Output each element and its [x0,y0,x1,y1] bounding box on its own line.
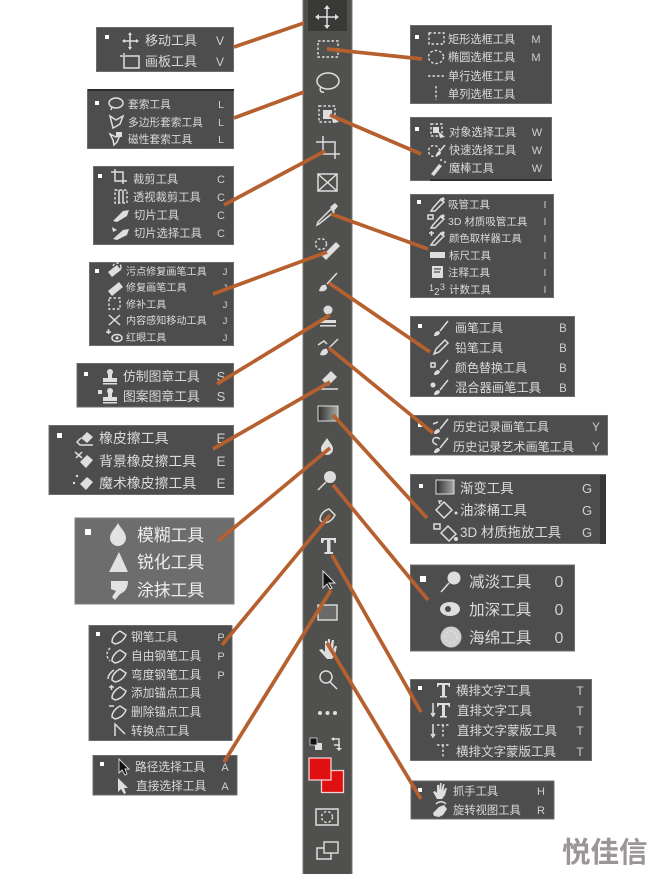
background color swatch [322,770,344,792]
row: 裁剪工具: 裁剪工具 [133,172,178,186]
row: 图案图章工具: S [217,389,226,404]
icon: pen tool [320,509,335,523]
icon: brush tool [319,273,337,291]
row: 横排文字工具 [437,683,584,698]
row: 混合器画笔工具: 混合器画笔工具 [455,380,541,395]
row: 计数工具: 1 [429,283,434,293]
icon: healing brush tool [316,238,340,260]
row: 弯度钢笔工具 [108,668,225,682]
row: 对象选择工具 [431,124,543,139]
row: 直排文字工具 [431,703,584,718]
panel: stamp tools [77,364,234,407]
row: 直接选择工具: 直接选择工具 [136,779,206,793]
row: 裁剪工具: C [217,174,225,186]
row: 污点修复画笔工具: J [223,267,228,278]
row: 橡皮擦工具: E [216,431,226,446]
icon: gradient tool [318,406,338,421]
panel: move tools [96,28,234,72]
row: 颜色替换工具 [431,360,567,375]
row: 自由钢笔工具 [107,648,225,663]
icon: more tools [318,711,337,715]
icon: type tool [321,538,336,554]
row: 直排文字蒙版工具: 直排文字蒙版工具 [457,723,558,738]
icon: path selection tool [323,571,335,589]
icon: lasso tool [317,73,339,92]
panel: eyedropper tools [410,194,554,298]
row: 海绵工具 [440,626,564,648]
row: 透视裁剪工具: 透视裁剪工具 [133,190,201,204]
row: 计数工具 [429,282,546,298]
row: 套索工具 [109,98,224,111]
arrow: type tool [332,555,421,712]
row: 标尺工具: I [544,250,546,262]
arrow: stamp tool [217,315,330,384]
row: 颜色替换工具: 颜色替换工具 [455,360,527,375]
row: 涂抹工具: 涂抹工具 [137,581,204,600]
arrow: path selection tool [224,590,331,762]
row: 魔术橡皮擦工具: 魔术橡皮擦工具 [99,475,196,491]
row: 背景橡皮擦工具: 背景橡皮擦工具 [99,453,196,469]
row: 模糊工具: 模糊工具 [137,526,204,545]
icon: eyedropper tool [317,203,338,225]
row: 魔棒工具 [431,159,543,176]
row: 画板工具: V [216,55,224,69]
row: 弯度钢笔工具: P [217,670,225,682]
row: 单行选框工具: 单行选框工具 [448,70,515,83]
icon: screen mode [317,842,338,859]
panel: crop tools [94,166,234,244]
row: 标尺工具: 标尺工具 [449,250,491,262]
icon: dodge tool [318,471,336,490]
row: 海绵工具: 海绵工具 [469,629,531,647]
row: 修复画笔工具: J [223,283,228,294]
row: 修复画笔工具 [108,281,228,296]
row: 计数工具: 2 [434,287,440,298]
row: 铅笔工具 [434,340,567,355]
row: 混合器画笔工具 [430,380,567,395]
row: 颜色取样器工具: I [544,233,546,245]
row: 钢笔工具: 钢笔工具 [131,630,178,644]
row: 快速选择工具: 快速选择工具 [449,143,516,157]
row: 背景橡皮擦工具: E [216,454,226,469]
row: 历史记录画笔工具 [433,419,600,434]
row: 减淡工具 [441,572,564,592]
row: 旋转视图工具: R [537,805,545,817]
icon: move tool [315,5,339,29]
row: 仿制图章工具: 仿制图章工具 [123,369,200,384]
row: 历史记录艺术画笔工具: Y [592,442,600,454]
row: 颜色取样器工具: 颜色取样器工具 [449,232,522,245]
row: 直排文字工具: T [576,704,584,718]
row: 矩形选框工具: 矩形选框工具 [448,33,515,46]
row: 修补工具: 修补工具 [126,298,166,311]
row: 抓手工具 [433,783,545,799]
row: 添加锚点工具 [109,685,201,700]
arrow: lasso tool [234,92,304,118]
row: 添加锚点工具: 添加锚点工具 [131,686,201,700]
row: 魔棒工具: 魔棒工具 [449,161,494,175]
row: 锐化工具 [109,552,204,572]
icon: history brush tool [318,339,338,355]
row: 矩形选框工具: M [531,34,541,46]
row: 椭圆选框工具 [428,50,541,64]
row: 单列选框工具: 单列选框工具 [448,87,515,101]
row: 透视裁剪工具: C [217,192,225,204]
toolbar [303,0,352,874]
row: 3D 材质拖放工具 [434,524,592,541]
arrow: eyedropper tool [331,214,428,249]
row: 椭圆选框工具: 椭圆选框工具 [448,50,515,64]
icon: clone stamp tool [320,306,336,326]
row: 画笔工具 [434,320,567,336]
row: 旋转视图工具 [433,802,545,817]
icon: eraser tool [321,371,338,389]
row: 转换点工具: 转换点工具 [131,724,190,738]
row: 内容感知移动工具: 内容感知移动工具 [126,314,207,327]
panel: pen tools [89,626,232,740]
row: 切片选择工具: C [217,228,225,240]
row: 椭圆选框工具: M [531,52,541,64]
row: 计数工具: 3 [440,282,445,292]
row: 颜色取样器工具 [429,231,546,245]
row: 吸管工具: 吸管工具 [448,198,490,211]
icon: zoom tool [320,671,337,689]
row: 抓手工具: 抓手工具 [453,784,498,798]
row: 钢笔工具: P [217,632,225,644]
row: 切片工具: C [217,210,225,222]
panel: hand tools [411,781,554,819]
row: 背景橡皮擦工具 [75,452,226,469]
row: 旋转视图工具: 旋转视图工具 [453,803,521,817]
icon: quick mask [316,809,338,825]
arrow: hand tool [327,643,421,799]
row: 油漆桶工具 [436,501,592,518]
row: 魔术橡皮擦工具 [73,475,226,491]
panel: history brush tools [410,416,608,455]
row: 渐变工具 [436,480,592,496]
row: 3D 材质拖放工具: 3D 材质拖放工具 [460,525,561,540]
arrow: marquee tool [327,49,422,59]
row: 注释工具: 注释工具 [448,266,490,279]
row: 磁性套索工具 [110,132,224,146]
arrow: history brush tool [329,348,433,433]
row: 橡皮擦工具 [77,430,226,446]
row: 直排文字蒙版工具 [431,723,584,738]
row: 切片选择工具 [112,226,225,240]
row: 魔术橡皮擦工具: E [216,476,226,491]
arrow: dodge tool [333,485,428,600]
row: 仿制图章工具: S [217,369,226,384]
row: 铅笔工具: B [559,343,567,355]
watermark: 悦佳信 [562,837,648,869]
panel: selection tools [410,118,552,181]
row: 污点修复画笔工具: 污点修复画笔工具 [126,265,207,278]
row: 吸管工具: I [544,199,546,211]
panel: lasso tools [88,89,234,148]
row: 多边形套索工具: L [218,117,224,129]
panel: blur tools [75,518,234,604]
row: 画板工具 [120,53,224,69]
row: 直接选择工具 [118,778,229,794]
arrow: gradient tool [333,415,427,518]
icon: hand tool [319,639,337,659]
row: 历史记录艺术画笔工具: 历史记录艺术画笔工具 [453,439,574,454]
row: 单列选框工具 [436,86,515,101]
row: 移动工具: V [216,34,224,48]
row: 多边形套索工具: 多边形套索工具 [128,116,203,129]
row: 弯度钢笔工具: 弯度钢笔工具 [131,668,201,682]
row: 画笔工具: B [559,323,567,335]
row: 混合器画笔工具: B [559,383,567,395]
arrow: selection tool [330,115,421,154]
arrow: blur tool [218,448,330,541]
row: 红眼工具 [106,329,228,344]
row: 注释工具 [432,266,546,279]
arrow: crop tool [224,151,325,205]
row: 吸管工具 [431,197,546,211]
row: 红眼工具: J [223,333,228,344]
row: 减淡工具: 0 [555,574,564,591]
panel: eraser tools [49,426,234,494]
row: 横排文字蒙版工具 [437,744,584,759]
icon: crop tool [316,136,340,159]
panel: gradient tools [410,474,606,544]
row: 路径选择工具: A [221,762,229,774]
row: 渐变工具: 渐变工具 [460,481,514,496]
row: 修补工具 [109,298,228,311]
row: 快速选择工具 [428,143,543,157]
arrow: move tool [234,23,304,47]
row: 颜色替换工具: B [559,363,567,375]
row: 直接选择工具: A [221,781,229,793]
row: 多边形套索工具 [110,116,224,129]
row: 加深工具: 0 [555,602,564,619]
row: 历史记录画笔工具: Y [592,422,600,434]
row: 橡皮擦工具: 橡皮擦工具 [99,430,169,446]
row: 套索工具: 套索工具 [128,98,171,111]
row: 横排文字蒙版工具: 横排文字蒙版工具 [456,744,557,759]
row: 注释工具: I [544,267,546,279]
panel: dodge tools [410,565,574,651]
row: 抓手工具: H [537,786,545,798]
row: 对象选择工具: W [532,127,543,139]
row: 移动工具 [122,32,224,50]
row: 透视裁剪工具 [115,190,225,204]
row: 内容感知移动工具: J [223,316,228,327]
panel: brush tools [410,316,574,396]
row: 修补工具: J [223,300,228,311]
row: 直排文字工具: 直排文字工具 [457,703,533,718]
row: 套索工具: L [218,99,224,111]
row: 横排文字工具: T [576,684,584,698]
row: 计数工具: 计数工具 [449,283,491,296]
row: 3D 材质拖放工具: G [582,525,592,540]
row: 锐化工具: 锐化工具 [137,553,204,572]
arrow: eraser tool [213,382,330,449]
arrow: healing tool [213,252,327,294]
row: 自由钢笔工具: P [217,651,225,663]
row: 裁剪工具 [111,169,225,186]
row: 减淡工具: 减淡工具 [469,573,531,591]
row: 3D 材质吸管工具 [428,214,546,228]
row: 内容感知移动工具 [109,314,228,327]
row: 标尺工具 [430,250,546,262]
row: 磁性套索工具: 磁性套索工具 [128,133,192,146]
row: 横排文字蒙版工具: T [576,745,584,759]
arrow: pen tool [222,515,330,645]
row: 魔棒工具: W [532,163,543,175]
row: 钢笔工具 [112,630,225,644]
row: 切片工具 [113,209,225,222]
row: 仿制图章工具 [103,369,226,384]
row: 油漆桶工具: 油漆桶工具 [460,503,527,518]
icon: default colors [310,738,322,750]
row: 磁性套索工具: L [218,134,224,146]
row: 直排文字蒙版工具: T [576,724,584,738]
row: 加深工具 [440,601,564,619]
row: 移动工具: 移动工具 [145,33,197,48]
icon: object selection tool [319,106,339,123]
row: 历史记录画笔工具: 历史记录画笔工具 [453,419,549,434]
panel: marquee tools [410,26,552,104]
row: 污点修复画笔工具 [108,263,228,278]
icon: rectangle tool [318,605,337,620]
icon: marquee tool [318,41,338,57]
row: 路径选择工具: 路径选择工具 [135,760,205,774]
row: 渐变工具: G [582,481,592,496]
row: 修复画笔工具: 修复画笔工具 [126,281,187,294]
row: 计数工具: I [544,284,546,296]
row: 3D 材质吸管工具: I [544,216,546,228]
row: 画笔工具: 画笔工具 [455,320,503,335]
row: 切片工具: 切片工具 [134,209,179,222]
row: 路径选择工具 [119,759,229,775]
row: 对象选择工具: 对象选择工具 [449,125,516,139]
row: 油漆桶工具: G [582,503,592,518]
row: 图案图章工具 [98,388,226,404]
row: 图案图章工具: 图案图章工具 [123,389,200,404]
icon: frame tool [318,174,337,191]
panel: path selection tools [93,756,237,795]
row: 铅笔工具: 铅笔工具 [455,340,503,355]
icon: blur tool [321,438,333,455]
row: 横排文字工具: 横排文字工具 [456,683,532,698]
row: 自由钢笔工具: 自由钢笔工具 [131,649,201,663]
foreground color swatch [309,758,331,780]
row: 海绵工具: 0 [555,630,564,647]
row: 加深工具: 加深工具 [469,601,531,619]
panel: type tools [410,680,592,760]
row: 画板工具: 画板工具 [145,54,197,69]
row: 快速选择工具: W [532,145,543,157]
row: 模糊工具 [110,523,204,546]
arrow: brush tool [329,283,430,352]
row: 红眼工具: 红眼工具 [126,331,166,344]
row: 矩形选框工具 [429,33,541,46]
panel: healing tools [90,262,234,346]
row: 删除锚点工具: 删除锚点工具 [131,705,201,719]
row: 3D 材质吸管工具: 3D 材质吸管工具 [448,215,528,228]
row: 历史记录艺术画笔工具 [433,438,600,454]
row: 切片选择工具: 切片选择工具 [134,226,202,240]
icon: swap colors [331,737,342,751]
